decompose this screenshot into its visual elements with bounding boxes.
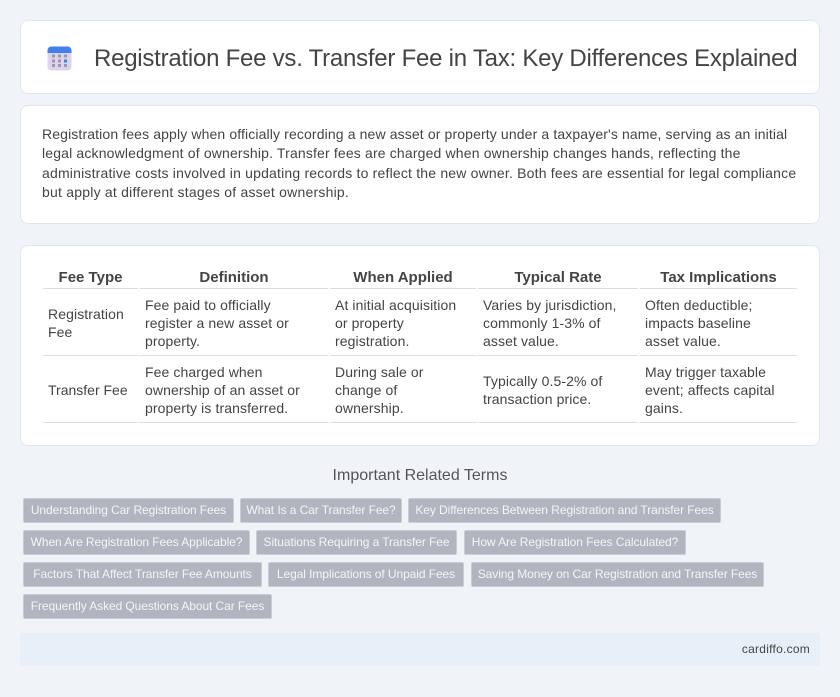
intro line 2: legal acknowledgment of ownership. Transfer fees are charged when ownership changes hands, reflecting the (42, 145, 741, 161)
comparison table panel (20, 245, 820, 446)
related term tags: Saving Money on Car Registration and Transfer Fees (478, 567, 757, 581)
related term tags: What Is a Car Transfer Fee? (246, 503, 396, 517)
row: transfer fee (48, 364, 775, 416)
row: registration fee (48, 297, 753, 349)
intro line 4: but apply at different stages of asset ownership. (42, 184, 349, 200)
row: registration fee: Fee (48, 324, 72, 340)
row: transfer fee: Fee charged when (145, 364, 263, 380)
row: transfer fee: Transfer Fee (48, 382, 128, 398)
row: registration fee: or property (335, 315, 404, 331)
related term tags: Factors That Affect Transfer Fee Amounts (33, 567, 252, 581)
row: registration fee: impacts baseline (645, 315, 751, 331)
row: transfer fee: transaction price. (483, 391, 591, 407)
intro text panel (20, 105, 820, 224)
row: registration fee: commonly 1-3% of (483, 315, 601, 331)
related term tags: Frequently Asked Questions About Car Fees (31, 599, 264, 613)
column headers: Tax Implications (660, 269, 777, 286)
related terms heading: Important Related Terms (333, 467, 507, 484)
row: transfer fee: event; affects capital (645, 382, 775, 398)
related term tags: Key Differences Between Registration and Transfer Fees (415, 503, 714, 517)
column headers (59, 269, 777, 286)
row: transfer fee: change of (335, 382, 397, 398)
column headers: When Applied (353, 269, 453, 286)
row: registration fee: At initial acquisition (335, 297, 456, 313)
row: transfer fee: property is transferred. (145, 400, 288, 416)
row: transfer fee: Typically 0.5-2% of (483, 373, 602, 389)
intro line 1: Registration fees apply when officially recording a new asset or property under a taxpayer's name, serving as an initial (42, 126, 787, 142)
column headers: Fee Type (59, 269, 122, 286)
intro line 3: administrative costs involved in updating records to reflect the new owner. Both fees are essential for legal compliance (42, 165, 796, 181)
column headers: Definition (199, 269, 269, 286)
row: registration fee: Varies by jurisdiction, (483, 297, 617, 313)
row: transfer fee: ownership. (335, 400, 404, 416)
row: transfer fee: During sale or (335, 364, 424, 380)
row: registration fee: property. (145, 333, 200, 349)
row: transfer fee: gains. (645, 400, 683, 416)
row: registration fee: asset value. (645, 333, 721, 349)
related term tags: Understanding Car Registration Fees (31, 503, 226, 517)
related term tags: How Are Registration Fees Calculated? (472, 535, 678, 549)
row: registration fee: register a new asset or (145, 315, 289, 331)
row: registration fee: asset value. (483, 333, 559, 349)
related term tags: Situations Requiring a Transfer Fee (264, 535, 449, 549)
header panel (20, 20, 820, 94)
related term tags: Legal Implications of Unpaid Fees (277, 567, 455, 581)
row: registration fee: registration. (335, 333, 409, 349)
row: registration fee: Registration (48, 306, 124, 322)
row: transfer fee: ownership of an asset or (145, 382, 300, 398)
column headers: Typical Rate (514, 269, 602, 286)
row: registration fee: Fee paid to officially (145, 297, 271, 313)
footer bar (20, 633, 820, 666)
related term tags: When Are Registration Fees Applicable? (31, 535, 242, 549)
footer source text: cardiffo.com (742, 642, 810, 656)
row: transfer fee: May trigger taxable (645, 364, 766, 380)
icon: calendar (48, 46, 72, 70)
row: registration fee: Often deductible; (645, 297, 753, 313)
title: Registration Fee vs. Transfer Fee in Tax: Key Differences Explained (94, 45, 797, 72)
related term tags (23, 498, 764, 619)
